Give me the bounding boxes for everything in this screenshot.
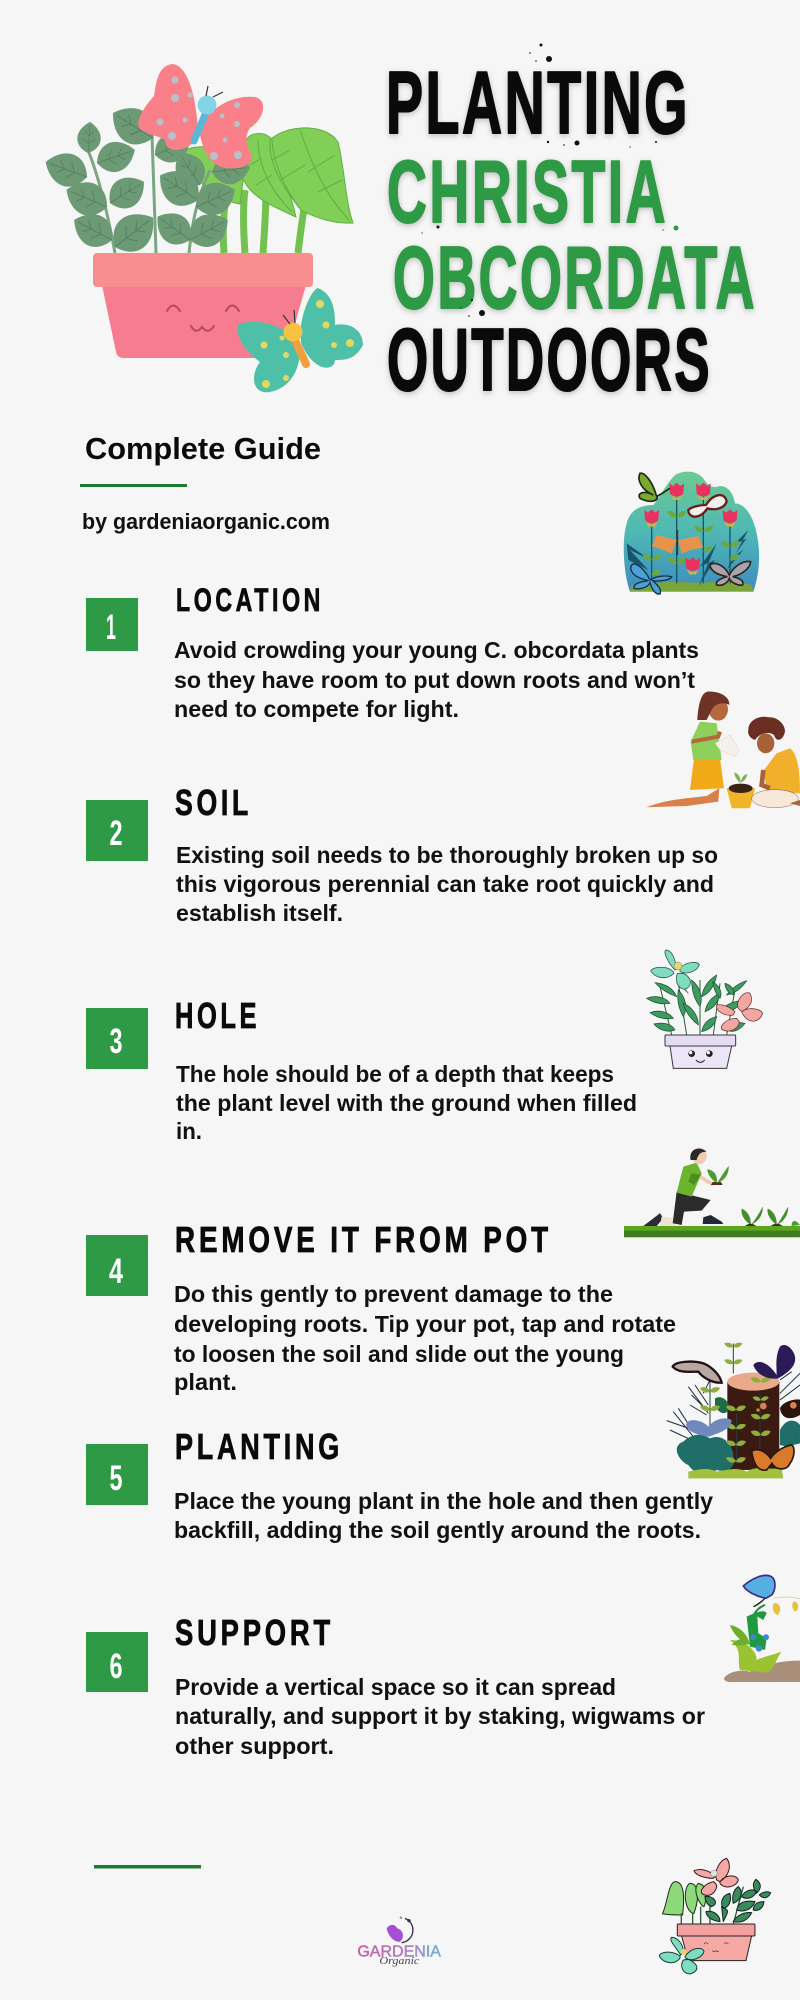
step 2 body: Existing soil needs to be thoroughly broken up so <box>176 842 718 868</box>
step 1 number badge <box>86 598 138 651</box>
pot <box>93 253 313 358</box>
illustration: tree stump with butterflies <box>667 1341 800 1478</box>
step 6 number badge <box>86 1632 148 1692</box>
step 6 body: other support. <box>175 1733 334 1759</box>
step 4 body: Do this gently to prevent damage to the <box>174 1281 613 1307</box>
step 4 body: developing roots. Tip your pot, tap and rotate <box>174 1311 676 1337</box>
step 2 body: establish itself. <box>176 900 343 926</box>
step 1 number badge: 1 <box>106 608 116 647</box>
illustration: man kneeling with seedling <box>624 1148 800 1237</box>
hero illustration: potted plants with butterflies <box>40 64 363 392</box>
teal butterfly <box>238 288 363 392</box>
title <box>386 44 757 409</box>
step 3 body: in. <box>176 1118 202 1144</box>
step 5 number badge <box>86 1444 148 1505</box>
step 3 body: The hole should be of a depth that keeps <box>176 1061 614 1087</box>
logo wordmark: GARDENIA <box>357 1944 441 1961</box>
step 1 body: need to compete for light. <box>174 696 459 722</box>
logo script: Organic <box>379 1956 420 1967</box>
dark green plants <box>40 98 252 261</box>
step 6 <box>86 1612 705 1759</box>
step 2 number badge <box>86 800 148 861</box>
step 1 body: so they have room to put down roots and won’t <box>174 667 695 693</box>
step 5 body: Place the young plant in the hole and then gently <box>174 1488 713 1514</box>
logo mark <box>387 1916 413 1943</box>
byline: by gardeniaorganic.com <box>82 509 330 534</box>
divider <box>80 484 187 487</box>
step 5 body: backfill, adding the soil gently around the roots. <box>174 1517 701 1543</box>
step 3 heading: HOLE <box>175 995 260 1036</box>
illustration: butterfly on flowering plant <box>724 1575 800 1682</box>
step 2 heading: SOIL <box>175 782 252 823</box>
illustration: pink pot with plants and butterflies <box>659 1858 771 1974</box>
step 5 number badge: 5 <box>110 1459 122 1498</box>
step 1 <box>86 582 699 722</box>
illustration: butterfly garden dome <box>624 472 759 594</box>
subtitle: Complete Guide: Complete Guide <box>85 431 321 466</box>
step 1 heading: LOCATION <box>176 582 324 618</box>
step 3 number badge <box>86 1008 148 1069</box>
footer divider <box>94 1865 201 1868</box>
step 4 body: to loosen the soil and slide out the young <box>174 1341 624 1367</box>
illustration: children watering seedling <box>647 692 800 808</box>
step 2 number badge: 2 <box>110 814 122 853</box>
step 2 <box>86 782 718 926</box>
ink splatter <box>421 44 678 317</box>
step 4 number badge <box>86 1235 148 1296</box>
step 1 body: Avoid crowding your young C. obcordata plants <box>174 637 699 663</box>
light green leaves <box>185 128 353 253</box>
step 4 body: plant. <box>174 1369 237 1395</box>
step 6 body: naturally, and support it by staking, wigwams or <box>175 1703 705 1729</box>
step 4 number badge: 4 <box>109 1252 123 1291</box>
step 3 number badge: 3 <box>110 1022 122 1061</box>
step 2 body: this vigorous perennial can take root quickly and <box>176 871 714 897</box>
illustration: lavender pot with plant and butterflies <box>647 950 763 1068</box>
step 6 number badge: 6 <box>110 1647 122 1686</box>
step 3 body: the plant level with the ground when filled <box>176 1090 637 1116</box>
logo: Gardenia Organic <box>357 1916 441 1967</box>
step 5 heading: PLANTING <box>175 1426 343 1467</box>
step 4 heading: REMOVE IT FROM POT <box>175 1219 552 1260</box>
pink butterfly <box>138 64 263 168</box>
step 6 heading: SUPPORT <box>175 1612 334 1653</box>
step 3 <box>86 995 637 1144</box>
step 5 <box>86 1426 713 1543</box>
step 4 <box>86 1219 676 1395</box>
step 6 body: Provide a vertical space so it can spread <box>175 1674 616 1700</box>
